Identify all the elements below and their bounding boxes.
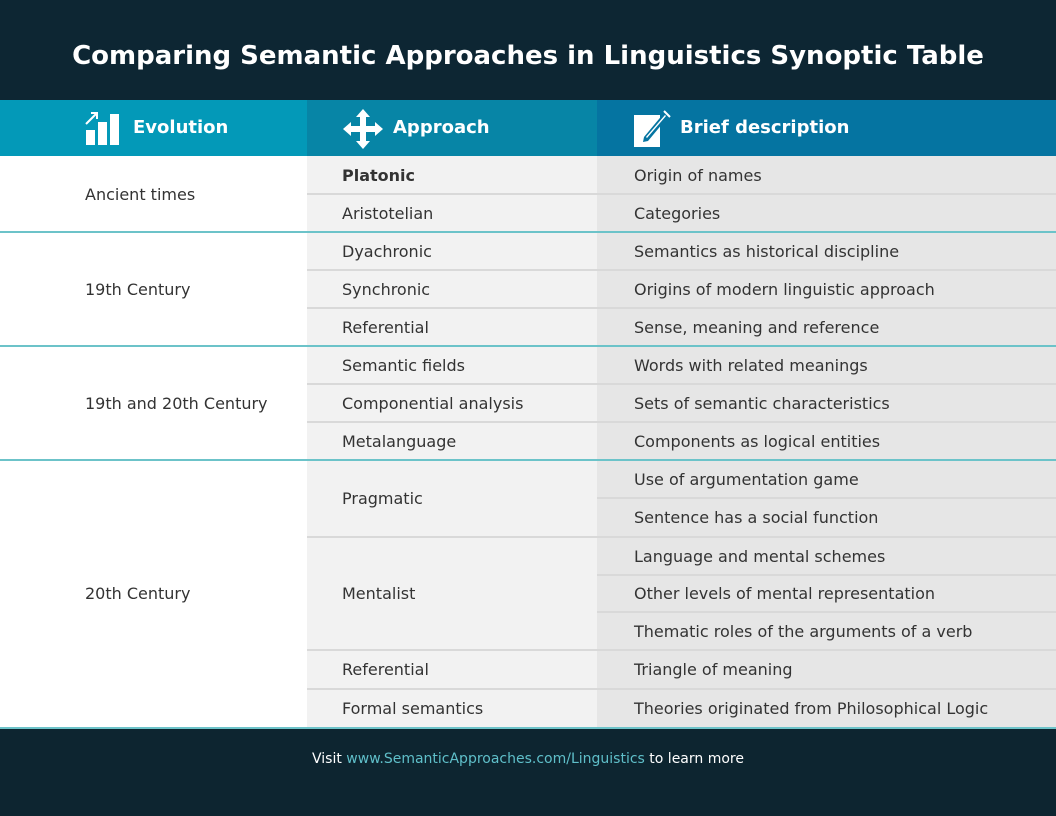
title bar <box>0 0 1056 100</box>
approach column: Componential analysis <box>342 394 523 412</box>
description column: Categories <box>634 204 720 222</box>
description column: Origins of modern linguistic approach <box>634 280 935 298</box>
evolution column <box>85 184 268 603</box>
description column: Semantics as historical discipline <box>634 242 899 260</box>
description column: Words with related meanings <box>634 356 868 374</box>
description column: Language and mental schemes <box>634 546 885 566</box>
evolution column: 19th Century <box>85 280 190 298</box>
evolution column: Ancient times <box>85 184 195 204</box>
description column: Other levels of mental representation <box>634 584 935 603</box>
title bar: Comparing Semantic Approaches in Linguistics Synoptic Table <box>72 41 984 71</box>
header: approach <box>307 100 597 156</box>
approach column: Platonic <box>342 166 415 184</box>
header: brief description: Brief description <box>680 117 849 138</box>
description column: Sets of semantic characteristics <box>634 394 890 412</box>
header: evolution <box>0 100 307 156</box>
description column: Sense, meaning and reference <box>634 318 879 336</box>
header: evolution: Evolution <box>133 117 228 138</box>
approach column: Pragmatic <box>342 489 423 508</box>
approach column: Referential <box>342 318 429 336</box>
evolution column: 20th Century <box>85 584 190 603</box>
description column: Sentence has a social function <box>634 508 878 527</box>
icon: move arrows <box>343 109 383 149</box>
footer: Visit www.SemanticApproaches.com/Linguistics to learn more <box>312 751 744 767</box>
description column <box>634 166 988 718</box>
description column: Components as logical entities <box>634 432 880 450</box>
approach column: Aristotelian <box>342 204 433 222</box>
approach column: Synchronic <box>342 280 430 298</box>
description column: Thematic roles of the arguments of a verb <box>634 622 972 640</box>
description column: Theories originated from Philosophical Logic <box>634 698 988 718</box>
description column: Use of argumentation game <box>634 470 859 488</box>
approach column: Semantic fields <box>342 356 465 374</box>
approach column: Mentalist <box>342 584 415 603</box>
approach column: Formal semantics <box>342 698 483 718</box>
description column: Triangle of meaning <box>634 660 793 679</box>
evolution column: 19th and 20th Century <box>85 394 268 412</box>
icon: pencil note <box>634 110 671 147</box>
approach column: Metalanguage <box>342 432 456 450</box>
approach column: Dyachronic <box>342 242 432 260</box>
header: brief description <box>597 100 1056 156</box>
column backgrounds <box>307 156 597 727</box>
header row <box>0 100 1056 156</box>
description column: Origin of names <box>634 166 762 184</box>
header: approach: Approach <box>393 117 490 138</box>
approach column <box>342 166 523 718</box>
approach column: Referential <box>342 660 429 679</box>
footer <box>0 727 1056 816</box>
icon: bar chart <box>85 112 119 145</box>
